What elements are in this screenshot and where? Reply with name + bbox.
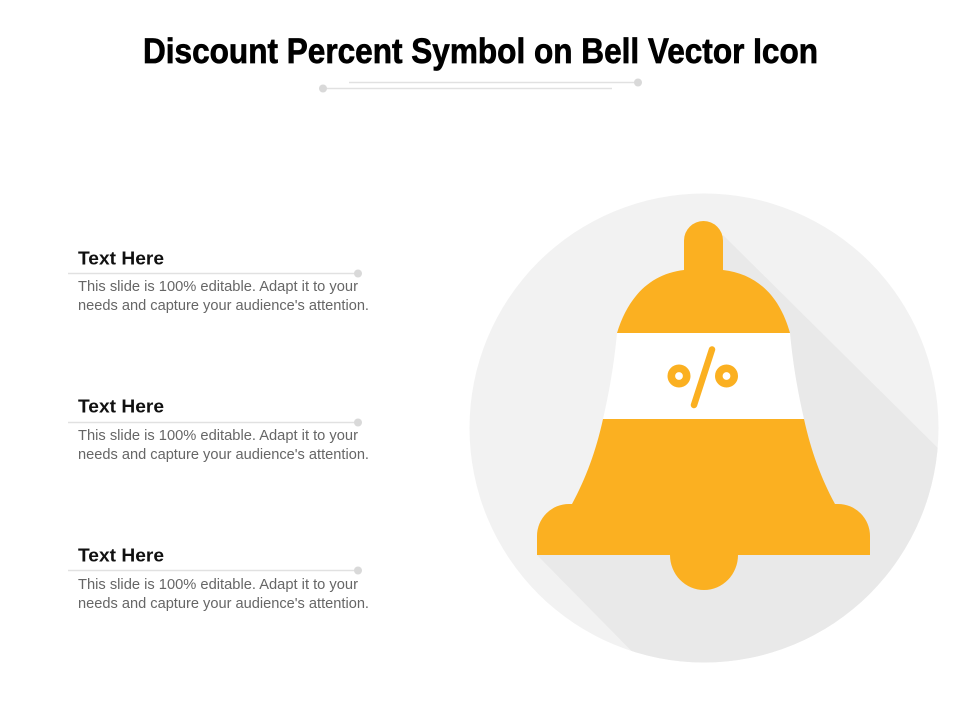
text block 3: Text Here	[78, 546, 164, 566]
text block 3	[68, 546, 369, 612]
icon: bell in circle	[470, 194, 950, 680]
title divider	[319, 78, 642, 92]
background circle	[470, 194, 938, 662]
percent symbol	[671, 350, 734, 405]
text block 2: Text Here	[78, 396, 164, 416]
title: Discount Percent Symbol on Bell Vector Icon	[143, 32, 818, 71]
text block 2: This slide is 100% editable. Adapt it to your	[78, 428, 358, 444]
white band	[603, 333, 804, 419]
text block 2	[68, 396, 369, 463]
text block 2: needs and capture your audience's attention.	[78, 447, 369, 463]
text block 3: This slide is 100% editable. Adapt it to your	[78, 577, 358, 593]
text block 1: This slide is 100% editable. Adapt it to your	[78, 279, 358, 295]
text block 3: needs and capture your audience's attention.	[78, 596, 369, 612]
bell body	[537, 221, 870, 590]
text block 1: Text Here	[78, 248, 164, 268]
text block 1	[68, 248, 369, 314]
text block 1: needs and capture your audience's attention.	[78, 298, 369, 314]
long shadow	[537, 235, 950, 680]
